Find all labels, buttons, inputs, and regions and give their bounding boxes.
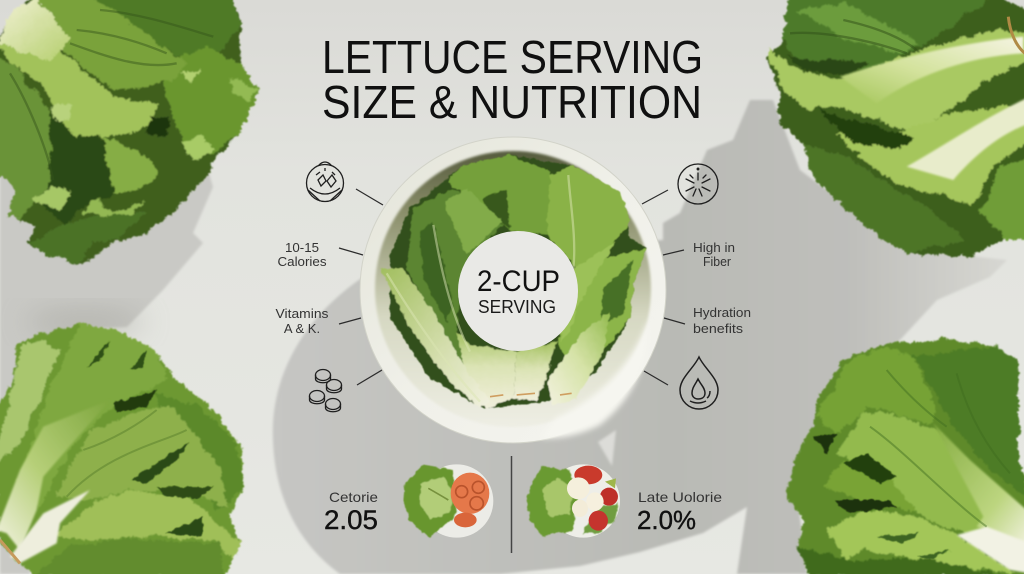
bowl	[360, 137, 666, 443]
small bowl: right	[527, 464, 620, 538]
title line 2: SIZE & NUTRITION	[322, 76, 702, 128]
shadow: top-left lettuce	[0, 100, 213, 574]
icon: fiber burst	[678, 164, 718, 204]
2-cup text: 2-CUP	[477, 265, 560, 298]
label: vitamins: A & K.	[284, 321, 320, 336]
shadow: light wedge near plate	[598, 430, 616, 466]
shadow: dark pool above bottom-left lettuce	[25, 310, 145, 334]
label: vitamins: Vitamins	[276, 306, 329, 321]
center label: 2-cup serving	[458, 231, 578, 351]
icon: lettuce in circle	[306, 162, 344, 202]
label: calories: Calories	[278, 254, 327, 269]
label: calories	[278, 240, 327, 269]
label: calories: 10-15	[285, 240, 319, 255]
lettuce: bottom right	[787, 340, 1024, 574]
lettuce: top left	[0, 0, 260, 265]
lettuce: bottom left	[0, 323, 243, 574]
stat: calorie: 2.05	[324, 505, 378, 535]
stat: late uolorie: Late Uolorie	[638, 489, 722, 505]
bowl lettuce	[380, 155, 647, 408]
label: hydration: benefits	[693, 321, 744, 336]
stat: calorie: Cetorie	[329, 489, 378, 505]
stat: late uolorie	[637, 489, 722, 535]
serving text: SERVING	[478, 297, 556, 317]
divider	[510, 456, 512, 553]
label: fiber: Fiber	[703, 254, 732, 269]
connector lines	[339, 189, 685, 385]
label: fiber	[693, 240, 735, 269]
label: hydration	[693, 305, 751, 336]
small plate: left	[403, 464, 493, 538]
title line 1: LETTUCE SERVING	[322, 31, 703, 83]
stat: late uolorie: 2.0%	[637, 505, 696, 535]
label: vitamins	[276, 306, 329, 336]
stat: calorie	[324, 489, 378, 535]
icon: vitamin coins	[310, 370, 342, 412]
label: hydration: Hydration	[693, 305, 751, 320]
lettuce: top right	[767, 0, 1024, 257]
icon: hydration drop	[680, 357, 718, 409]
label: fiber: High in	[693, 240, 735, 255]
title	[322, 31, 703, 128]
shadow: bowl and lettuces on the right	[273, 100, 1007, 574]
